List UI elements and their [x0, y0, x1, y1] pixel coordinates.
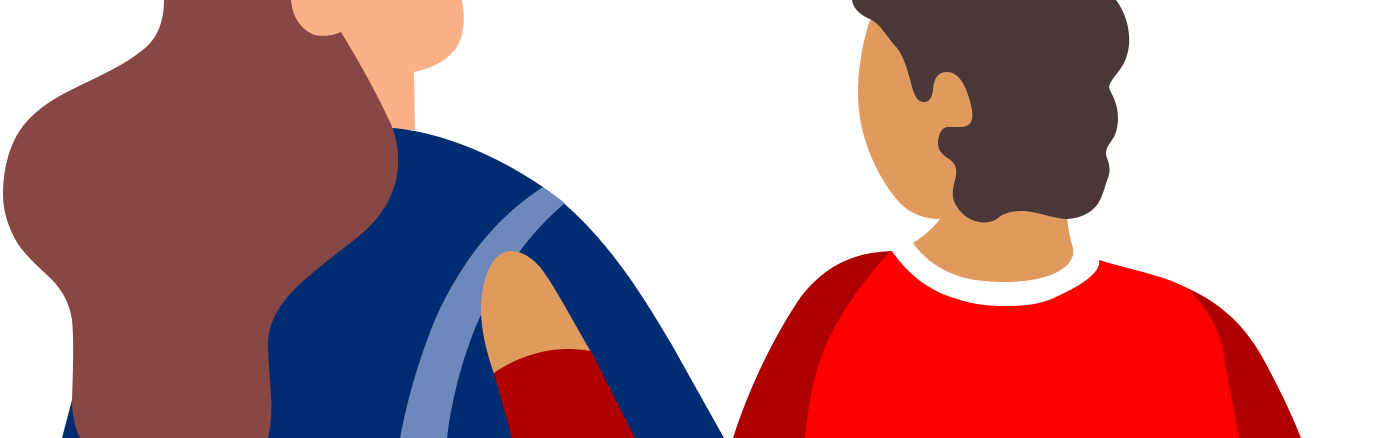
woman ear lobe over hair	[291, 0, 360, 36]
sweater stripe	[400, 187, 565, 438]
red sleeve	[494, 349, 635, 438]
white collar	[892, 240, 1099, 306]
man curly hair	[852, 0, 1129, 222]
figure: woman	[3, 0, 724, 438]
man sweater sleeves	[733, 251, 1301, 438]
woman hair	[3, 0, 398, 438]
man face	[858, 20, 1000, 219]
woman navy top	[62, 128, 724, 438]
woman neck and jaw	[300, 0, 464, 130]
man's hand on woman's back	[481, 251, 591, 374]
man neck	[913, 190, 1073, 282]
man sweater body	[805, 250, 1239, 438]
figure: man	[733, 0, 1301, 438]
